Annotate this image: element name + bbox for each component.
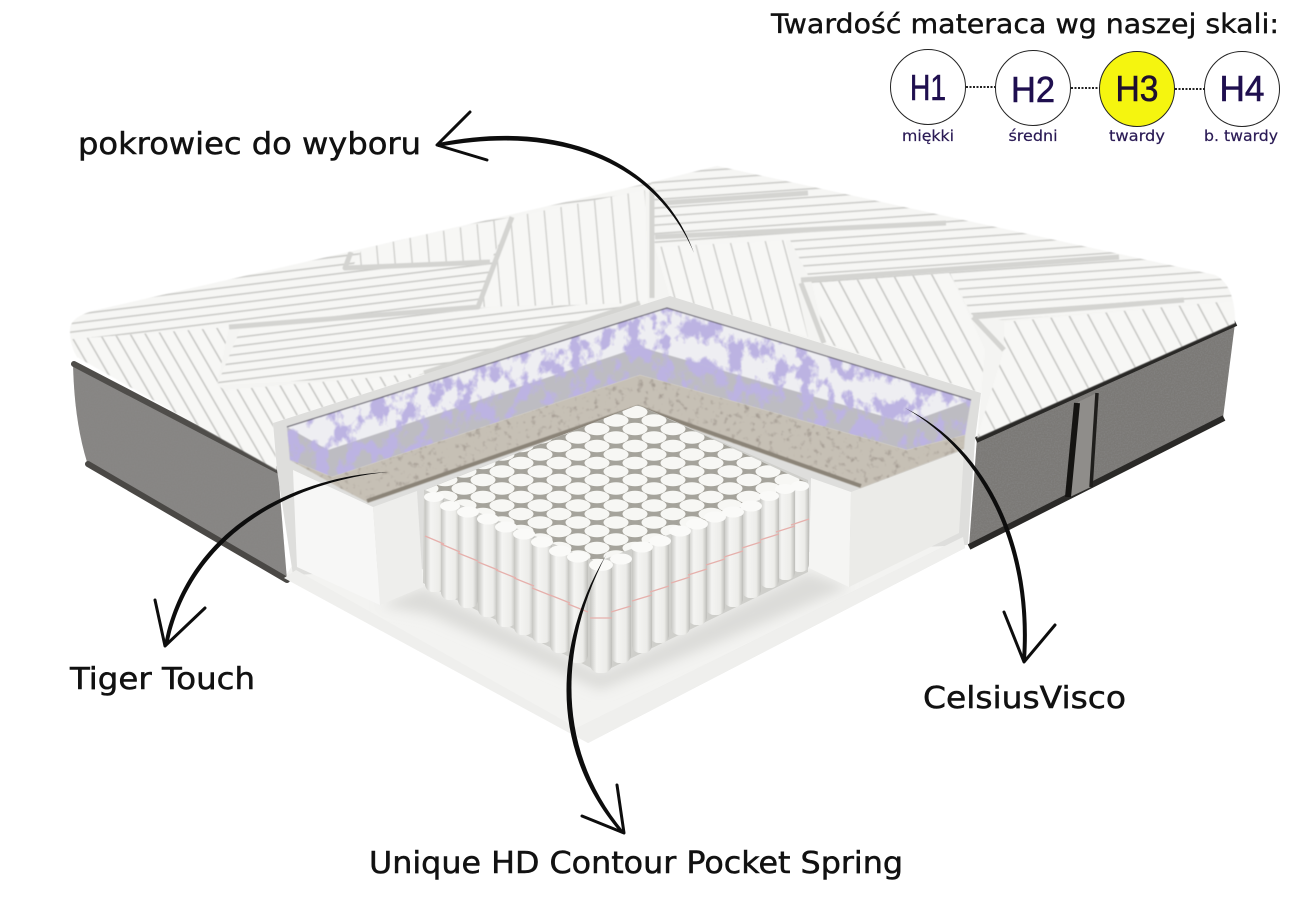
H2: H2 [1011, 69, 1055, 110]
H1: miękki [902, 127, 954, 145]
H1: H1 [910, 67, 946, 108]
arrow: Unique HD Contour Pocket Spring [566, 555, 624, 833]
H2 [996, 50, 1070, 145]
H4: b. twardy [1204, 127, 1278, 145]
base front edge [284, 537, 965, 743]
memory foam layer: CelsiusVisco [280, 300, 980, 485]
H2: średni [1008, 127, 1058, 145]
arrow: Tiger Touch [155, 472, 388, 646]
pocket spring block [410, 400, 820, 673]
base foam slab [284, 530, 965, 743]
cut cover band [273, 296, 981, 575]
H3 highlighted [1100, 52, 1174, 145]
left foam block [293, 470, 423, 605]
connectors [966, 87, 1204, 89]
firmness scale [890, 50, 1280, 145]
label: Unique HD Contour Pocket Spring: Unique HD Contour Pocket Spring [369, 846, 903, 881]
heading: firmness scale: Twardość materaca wg naszej skali: [770, 9, 1279, 40]
latex layer: Tiger Touch [292, 375, 966, 504]
label: Tiger Touch: Tiger Touch [69, 662, 255, 697]
left grey side panel [71, 361, 290, 583]
mattress illustration [60, 155, 1240, 743]
spring column tops [424, 481, 809, 571]
label: CelsiusVisco: CelsiusVisco [923, 681, 1126, 716]
right foam block [809, 450, 964, 587]
H1 [890, 50, 966, 145]
H3 highlighted: H3 [1116, 68, 1158, 109]
label: pokrowiec do wyboru: pokrowiec do wyboru [78, 127, 421, 162]
arrow: pokrowiec [437, 112, 694, 253]
spring columns [425, 482, 809, 673]
H4: H4 [1220, 68, 1264, 109]
H3 highlighted: twardy [1109, 127, 1165, 145]
right grey side panel [960, 320, 1240, 560]
spring red stitching [425, 519, 809, 618]
H4 [1204, 52, 1280, 145]
arrow: CelsiusVisco [905, 408, 1055, 662]
quilted cover top [60, 155, 1240, 470]
